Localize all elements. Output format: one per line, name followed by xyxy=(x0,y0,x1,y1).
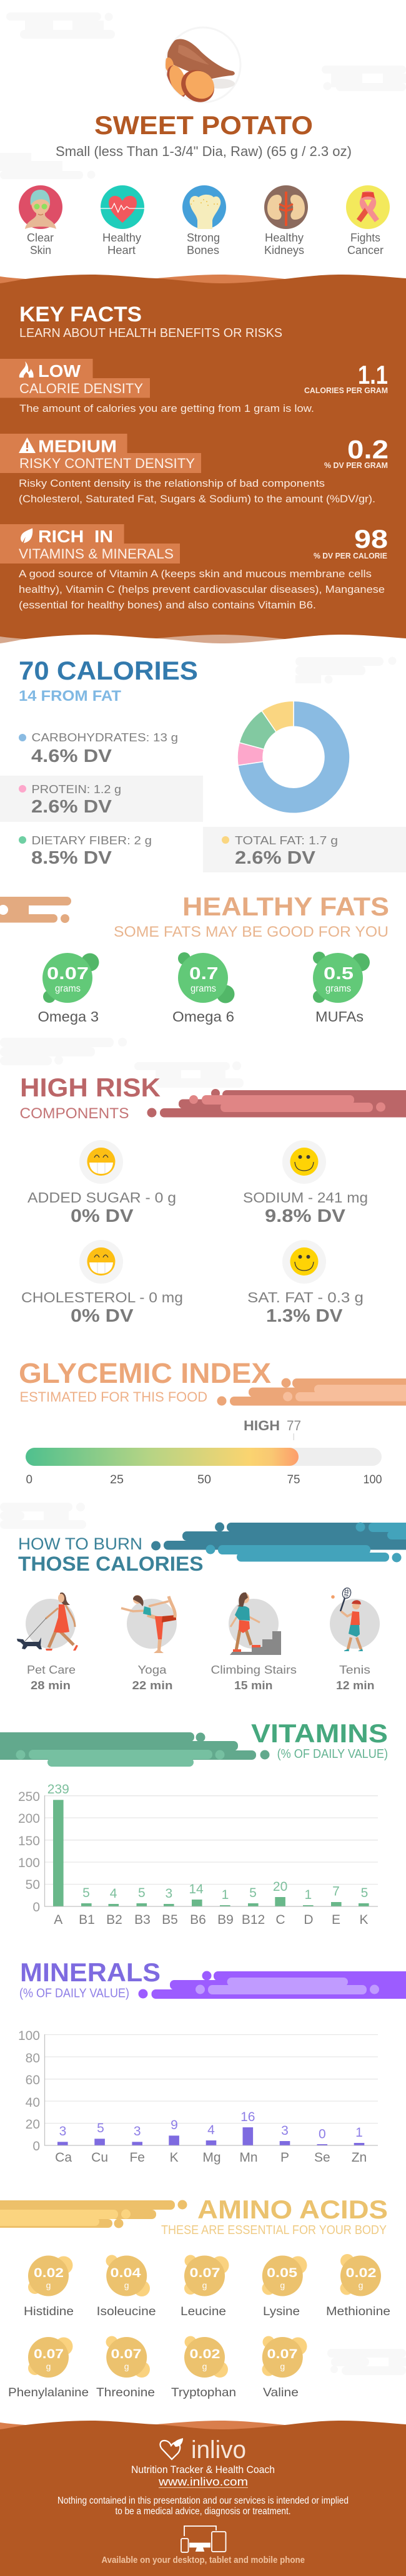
badge: isoleucine: Isoleucine xyxy=(97,2305,156,2318)
badge: tryptophan: 0.02 xyxy=(190,2347,220,2361)
fact: medium risky content density: Risky Content density is the relationship of bad components xyxy=(19,477,325,489)
badge: threonine: 0.07 xyxy=(111,2347,141,2361)
badge: histidine: 0.02 xyxy=(34,2266,64,2280)
label: healthy heart: Heart xyxy=(107,244,136,256)
activity: pet care xyxy=(17,1593,78,1692)
badge: omega 3 xyxy=(37,953,99,1025)
fact: low calorie density: LOW xyxy=(38,361,81,381)
fact: low calorie density: 1.1 xyxy=(358,360,388,389)
glycemic gauge xyxy=(26,1448,382,1466)
badge: leucine xyxy=(181,2255,229,2318)
label: healthy heart xyxy=(102,232,141,256)
heading: VITAMINS xyxy=(251,1719,388,1748)
y axis labels: 0 xyxy=(32,1900,40,1915)
badge: histidine xyxy=(24,2255,74,2318)
y axis labels: 50 xyxy=(26,1878,40,1892)
health benefits row xyxy=(19,185,390,256)
decorative banner xyxy=(0,897,71,923)
legend: total fat: TOTAL FAT: 1.7 g xyxy=(235,834,338,847)
x axis labels: Cu xyxy=(91,2150,108,2165)
label: strong bones: Bones xyxy=(187,244,219,256)
bar values: 1 xyxy=(355,2125,363,2140)
fact: rich in vitamins and minerals xyxy=(0,524,388,611)
gauge scale: 0 xyxy=(26,1473,32,1486)
bar values xyxy=(47,1782,368,1902)
bar values xyxy=(59,2110,363,2142)
x axis labels: B12 xyxy=(242,1913,265,1927)
logo: inlivo: inlivo xyxy=(191,2436,246,2464)
gauge scale: 75 xyxy=(287,1473,300,1486)
fact: low calorie density: The amount of calories you are getting from 1 gram is low. xyxy=(19,402,314,414)
badge: mufas: grams xyxy=(325,983,351,994)
icon: devices xyxy=(181,2526,226,2552)
fact: low calorie density: CALORIE DENSITY xyxy=(19,381,143,396)
badge: omega 6: 0.7 xyxy=(189,964,219,983)
bars xyxy=(53,1800,369,1906)
fact: rich in vitamins and minerals: RICH IN xyxy=(38,527,113,546)
legend: protein: PROTEIN: 1.2 g xyxy=(31,783,121,796)
subheading: ESTIMATED FOR THIS FOOD xyxy=(20,1389,207,1405)
donut chart xyxy=(237,701,350,813)
label: clear skin: Skin xyxy=(30,244,51,256)
badge: phenylalanine: 0.07 xyxy=(34,2347,64,2361)
legend: dietary fiber xyxy=(19,834,152,868)
badge: phenylalanine: Phenylalanine xyxy=(8,2386,89,2399)
label: healthy heart: Healthy xyxy=(102,232,141,244)
bar values: 4 xyxy=(110,1886,117,1901)
fact: rich in vitamins and minerals: VITAMINS & MINERALS xyxy=(19,546,174,562)
item: sodium: SODIUM - 241 mg xyxy=(243,1189,368,1206)
logo: inlivo xyxy=(160,2436,246,2464)
badge: lysine: g xyxy=(280,2280,285,2290)
label: strong bones: Strong xyxy=(187,232,220,244)
badge: valine: g xyxy=(280,2361,285,2371)
item: saturated fat: 1.3% DV xyxy=(266,1306,343,1326)
legend: carbohydrates: 4.6% DV xyxy=(31,746,112,766)
panel: healthy fats xyxy=(0,892,389,1025)
badge: isoleucine xyxy=(97,2255,156,2318)
activity: tennis: 12 min xyxy=(336,1679,375,1692)
fact: rich in vitamins and minerals: 98 xyxy=(354,524,388,554)
activity: climbing stairs: 15 min xyxy=(234,1679,272,1692)
label: clear skin: Clear xyxy=(27,232,54,244)
icon: smiling face xyxy=(290,1247,319,1276)
panel: how to burn calories xyxy=(17,1523,406,1692)
panel: key facts xyxy=(0,275,406,653)
x axis labels: P xyxy=(280,2150,289,2165)
x axis labels: Se xyxy=(314,2150,330,2165)
label: strong bones xyxy=(187,232,220,256)
disclaimer: to be a medical advice, diagnosis or treatment. xyxy=(115,2506,291,2517)
title: SWEET POTATO xyxy=(94,110,313,140)
bar values: 5 xyxy=(97,2121,104,2135)
icon: clear skin xyxy=(19,185,62,229)
badge: isoleucine: 0.04 xyxy=(110,2266,141,2280)
x axis labels: B6 xyxy=(190,1913,206,1927)
y axis labels: 80 xyxy=(26,2051,40,2066)
x axis labels: B3 xyxy=(134,1913,151,1927)
badge: omega 6: Omega 6 xyxy=(172,1008,234,1025)
x axis labels: B1 xyxy=(79,1913,95,1927)
bar values: 16 xyxy=(240,2110,255,2124)
subheading: THESE ARE ESSENTIAL FOR YOUR BODY xyxy=(161,2223,387,2237)
bar values: 239 xyxy=(47,1782,69,1797)
x axis labels xyxy=(54,1913,369,1927)
y axis labels: 250 xyxy=(18,1790,40,1804)
item: sodium xyxy=(243,1140,368,1226)
subheading: (% OF DAILY VALUE) xyxy=(277,1747,388,1761)
item: cholesterol: 0% DV xyxy=(71,1306,134,1326)
bar values: 14 xyxy=(189,1882,204,1896)
icon: healthy kidneys xyxy=(264,185,308,229)
disclaimer xyxy=(57,2496,349,2517)
subheading: LEARN ABOUT HEALTH BENEFITS OR RISKS xyxy=(19,326,282,340)
badge: tryptophan xyxy=(171,2336,236,2399)
panel: amino acids xyxy=(0,2195,390,2399)
heading: AMINO ACIDS xyxy=(197,2195,388,2224)
badge: mufas: MUFAs xyxy=(315,1008,364,1025)
disclaimer: Nothing contained in this presentation and our services is intended or implied xyxy=(57,2496,349,2506)
fact: medium risky content density xyxy=(0,434,389,505)
bar values: 3 xyxy=(134,2124,141,2139)
x axis labels: K xyxy=(170,2150,179,2165)
x axis labels: Ca xyxy=(55,2150,72,2165)
y axis labels: 150 xyxy=(18,1834,40,1848)
badge: lysine: 0.05 xyxy=(267,2266,297,2280)
label: clear skin xyxy=(27,232,54,256)
badge: threonine xyxy=(96,2336,155,2399)
bar values: 9 xyxy=(171,2118,178,2132)
icon: leaf xyxy=(21,528,32,543)
badge: threonine: Threonine xyxy=(96,2386,155,2399)
activity: pet care: 28 min xyxy=(31,1679,71,1692)
legend: carbohydrates xyxy=(19,731,178,766)
heading: GLYCEMIC INDEX xyxy=(19,1357,271,1389)
serving size subtitle: Small (less Than 1-3/4" Dia, Raw) (65 g / 2.3 oz) xyxy=(56,144,352,159)
gauge scale: 25 xyxy=(110,1473,124,1486)
icon: grinning face xyxy=(87,1148,115,1176)
activity: pet care: Pet Care xyxy=(27,1663,76,1676)
bar values: 7 xyxy=(332,1885,340,1899)
bar chart: vitamins xyxy=(18,1782,378,1927)
gauge label: 77 xyxy=(287,1418,301,1433)
heading: HIGH RISK xyxy=(20,1073,161,1102)
heading line 1: HOW TO BURN xyxy=(18,1534,142,1553)
food photo: sweet potato xyxy=(163,27,240,109)
gauge scale: 100 xyxy=(364,1473,382,1486)
activity: climbing stairs: Climbing Stairs xyxy=(211,1663,297,1676)
badge: methionine: g xyxy=(359,2280,363,2290)
badge: omega 3: grams xyxy=(55,983,81,994)
panel: minerals xyxy=(18,1958,406,2165)
y axis labels: 40 xyxy=(26,2095,40,2110)
y axis labels: 200 xyxy=(18,1812,40,1826)
bar values: 1 xyxy=(305,1888,312,1902)
y axis labels: 0 xyxy=(32,2139,40,2154)
availability note: Available on your desktop, tablet and mobile phone xyxy=(101,2555,305,2565)
y axis labels xyxy=(18,2029,40,2154)
legend: dietary fiber: DIETARY FIBER: 2 g xyxy=(31,834,152,847)
website link: www.inlivo.com xyxy=(158,2476,248,2488)
activity: tennis xyxy=(330,1587,380,1692)
badge: phenylalanine: g xyxy=(46,2361,51,2371)
badge: omega 3: 0.07 xyxy=(47,964,89,983)
item: added sugar xyxy=(27,1140,176,1226)
fact: low calorie density xyxy=(0,359,388,414)
x axis labels: B9 xyxy=(217,1913,234,1927)
decorative banner xyxy=(151,1523,406,1563)
item: cholesterol xyxy=(21,1240,183,1326)
bar values: 0 xyxy=(319,2127,326,2142)
bars xyxy=(57,2127,364,2145)
badge: leucine: 0.07 xyxy=(190,2266,220,2280)
bar values: 3 xyxy=(59,2124,66,2139)
fact: medium risky content density: % DV PER GRAM xyxy=(324,461,388,470)
bar values: 5 xyxy=(361,1886,368,1900)
label: healthy kidneys: Healthy xyxy=(265,232,304,244)
fact: rich in vitamins and minerals: % DV PER CALORIE xyxy=(314,551,387,560)
x axis labels: D xyxy=(304,1913,314,1927)
bar values: 3 xyxy=(281,2124,289,2138)
item: cholesterol: CHOLESTEROL - 0 mg xyxy=(21,1289,183,1305)
x axis labels: B2 xyxy=(106,1913,122,1927)
badge: mufas xyxy=(313,952,370,1025)
bar values: 3 xyxy=(165,1886,172,1901)
activity: climbing stairs xyxy=(211,1593,297,1692)
icon: grinning face xyxy=(87,1247,115,1276)
badge: tryptophan: Tryptophan xyxy=(171,2386,236,2399)
badge: valine: 0.07 xyxy=(267,2347,297,2361)
panel: glycemic index xyxy=(19,1357,406,1486)
x axis labels: C xyxy=(275,1913,285,1927)
legend: total fat: 2.6% DV xyxy=(235,848,316,868)
decorative banner xyxy=(0,2200,187,2228)
fact: medium risky content density: RISKY CONTENT DENSITY xyxy=(19,456,195,471)
item: added sugar: ADDED SUGAR - 0 g xyxy=(27,1189,176,1206)
icon: strong bones xyxy=(182,185,226,229)
badge: lysine: Lysine xyxy=(263,2305,300,2318)
subheading: (% OF DAILY VALUE) xyxy=(19,1987,129,2001)
fact: rich in vitamins and minerals: A good source of Vitamin A (keeps skin and mucous membrane cells xyxy=(19,568,372,580)
badge: valine: Valine xyxy=(263,2386,299,2399)
badge: mufas: 0.5 xyxy=(324,964,354,983)
badge: omega 6 xyxy=(172,952,235,1025)
heading: MINERALS xyxy=(20,1958,161,1987)
icon: flame xyxy=(19,361,34,378)
bar values: 5 xyxy=(138,1886,146,1900)
x axis labels: A xyxy=(54,1913,62,1927)
decorative banner xyxy=(217,1378,406,1405)
label: fights cancer: Cancer xyxy=(347,244,384,256)
legend: total fat xyxy=(222,834,338,868)
badge: leucine: Leucine xyxy=(181,2305,226,2318)
gauge scale: 50 xyxy=(197,1473,211,1486)
bar values: 1 xyxy=(222,1888,229,1902)
tagline: Nutrition Tracker & Health Coach xyxy=(131,2464,275,2476)
badge: lysine xyxy=(262,2255,307,2318)
x axis labels: Fe xyxy=(129,2150,145,2165)
badge: histidine: Histidine xyxy=(24,2305,74,2318)
fact: medium risky content density: (Cholesterol, Saturated Fat, Sugars & Sodium) to the amount (%DV/gr). xyxy=(19,493,375,505)
y axis labels: 60 xyxy=(26,2073,40,2087)
decorative banner xyxy=(0,1732,270,1767)
item: added sugar: 0% DV xyxy=(71,1206,134,1226)
badge: methionine: 0.02 xyxy=(346,2266,376,2280)
subheading: COMPONENTS xyxy=(20,1105,129,1122)
subheading: SOME FATS MAY BE GOOD FOR YOU xyxy=(114,924,389,940)
y axis labels: 100 xyxy=(18,1856,40,1870)
panel: footer xyxy=(0,2421,406,2576)
x axis labels: E xyxy=(332,1913,340,1927)
badge: isoleucine: g xyxy=(124,2280,129,2290)
activity: tennis: Tenis xyxy=(339,1663,370,1676)
item: saturated fat xyxy=(247,1240,364,1326)
y axis labels: 100 xyxy=(18,2029,40,2043)
icon: smiling face xyxy=(290,1148,319,1176)
badge: omega 3: Omega 3 xyxy=(37,1008,99,1025)
x axis labels: B5 xyxy=(162,1913,178,1927)
bar values: 5 xyxy=(249,1886,257,1900)
subheading: from fat: 14 FROM FAT xyxy=(19,688,121,705)
badge: valine xyxy=(262,2336,307,2399)
heading: key facts: KEY FACTS xyxy=(19,303,142,326)
activity: yoga: 22 min xyxy=(132,1679,172,1692)
fact: low calorie density: CALORIES PER GRAM xyxy=(304,386,388,395)
badge: phenylalanine xyxy=(8,2337,89,2399)
badge: methionine xyxy=(326,2254,390,2318)
fact: rich in vitamins and minerals: (essential for healthy bones) and also contains Vitamin B6. xyxy=(19,599,316,611)
icon: warning triangle xyxy=(19,437,36,453)
x axis labels: Mg xyxy=(202,2150,221,2165)
bar values: 4 xyxy=(207,2123,215,2137)
label: fights cancer: Fights xyxy=(350,232,380,244)
activity: yoga: Yoga xyxy=(137,1663,167,1676)
legend: protein xyxy=(19,783,121,817)
gauge label xyxy=(244,1418,301,1440)
x axis labels: K xyxy=(359,1913,369,1927)
bar chart: minerals xyxy=(18,2029,378,2165)
y axis labels: 20 xyxy=(26,2117,40,2132)
gauge label: HIGH xyxy=(244,1418,280,1433)
decorative banner xyxy=(139,1971,406,1999)
badge: histidine: g xyxy=(46,2280,51,2290)
badge: methionine: Methionine xyxy=(326,2305,390,2318)
icon: ribbon xyxy=(346,185,390,229)
activity: yoga xyxy=(121,1595,177,1692)
decorative banner xyxy=(147,1089,406,1117)
legend: protein: 2.6% DV xyxy=(31,797,112,817)
item: saturated fat: SAT. FAT - 0.3 g xyxy=(247,1289,364,1305)
fact: medium risky content density: 0.2 xyxy=(347,434,389,464)
y axis labels xyxy=(18,1790,40,1915)
badge: threonine: g xyxy=(124,2361,129,2371)
badge: tryptophan: g xyxy=(202,2361,207,2371)
panel: vitamins xyxy=(0,1719,388,1927)
legend: carbohydrates: CARBOHYDRATES: 13 g xyxy=(31,731,178,744)
x axis labels xyxy=(55,2150,367,2165)
x axis labels: Zn xyxy=(352,2150,367,2165)
panel: calories xyxy=(0,656,406,872)
heading: 70 calories: 70 CALORIES xyxy=(19,656,198,685)
panel: high risk components xyxy=(20,1073,406,1326)
legend: dietary fiber: 8.5% DV xyxy=(31,848,112,868)
fact: rich in vitamins and minerals: healthy), Vitamin C (helps prevent cardiovascular diseases), Manganese xyxy=(19,583,385,595)
heading line 2: THOSE CALORIES xyxy=(18,1553,204,1575)
fact: medium risky content density: MEDIUM xyxy=(38,437,117,456)
x axis labels: Mn xyxy=(239,2150,258,2165)
heading: HEALTHY FATS xyxy=(182,892,389,921)
gauge scale xyxy=(26,1473,382,1486)
bar values: 5 xyxy=(82,1886,90,1900)
badge: leucine: g xyxy=(202,2280,207,2290)
label: healthy kidneys: Kidneys xyxy=(264,244,304,256)
label: fights cancer xyxy=(347,232,384,256)
label: healthy kidneys xyxy=(264,232,304,256)
bar values: 20 xyxy=(273,1880,287,1894)
icon: healthy heart xyxy=(101,185,144,229)
item: sodium: 9.8% DV xyxy=(265,1206,346,1226)
badge: omega 6: grams xyxy=(191,983,216,994)
